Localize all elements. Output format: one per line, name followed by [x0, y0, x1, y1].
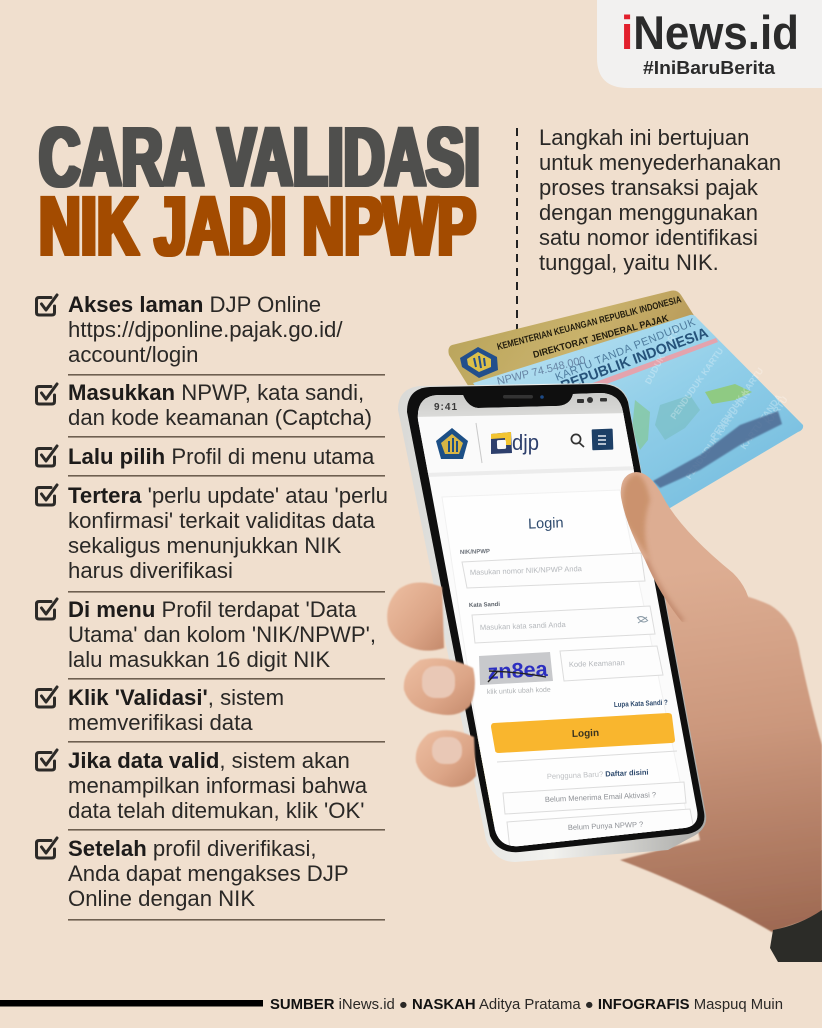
KTP text: KARTU TANDA PENDUDUK: [554, 316, 698, 384]
intro paragraph: [539, 125, 781, 275]
step 3: Lalu pilih Profil di menu utama: [68, 444, 375, 469]
intro paragraph: satu nomor identifikasi: [539, 225, 758, 250]
KTP watermark: KARTU: [763, 395, 790, 426]
step 6: [36, 685, 385, 743]
step 1: [36, 292, 385, 376]
step 5: lalu masukkan 16 digit NIK: [68, 647, 330, 672]
intro paragraph: Langkah ini bertujuan: [539, 125, 749, 150]
step 2: Masukkan NPWP, kata sandi,: [68, 380, 364, 405]
KTP watermark: PENDUDUK KARTU: [708, 366, 765, 441]
button: activation email: [503, 782, 686, 814]
app header: [414, 413, 638, 474]
djp logo: djp: [512, 430, 539, 455]
button: NPWP: [507, 809, 696, 850]
field: password: Kata Sandi: [469, 602, 500, 609]
register link: Pengguna Baru? Daftar disini: [547, 768, 649, 781]
status icons: [577, 397, 607, 403]
phone bezel: [407, 384, 704, 852]
step 7: Jika data valid, sistem akan: [68, 748, 350, 773]
step 1: https://djponline.pajak.go.id/: [68, 317, 343, 342]
KTP watermark: [643, 323, 790, 481]
field: NIK: [460, 549, 645, 588]
intro paragraph: untuk menyederhanakan: [539, 150, 781, 175]
KTP text: NPWP 74.548.000: [496, 354, 587, 388]
illustration: finger 2: [404, 658, 475, 715]
step 3: [36, 444, 385, 477]
step 1: Akses laman DJP Online: [68, 292, 321, 317]
field: NIK: Masukan nomor NIK/NPWP Anda: [470, 564, 583, 577]
yellow side strip: [476, 730, 494, 824]
menu button: [592, 429, 613, 450]
title: CARA VALIDASI: [39, 110, 480, 204]
step 8: Anda dapat mengakses DJP: [68, 861, 349, 886]
illustration: thumb: [621, 472, 750, 622]
captcha: zn8ea: [487, 658, 548, 684]
step 5: Utama' dan kolom 'NIK/NPWP',: [68, 622, 376, 647]
step 6: Klik 'Validasi', sistem: [68, 685, 284, 710]
logo tagline: #IniBaruBerita: [643, 58, 776, 78]
step 7: data telah ditemukan, klik 'OK': [68, 798, 364, 823]
button: activation email: Belum Menerima Email Aktivasi ?: [545, 790, 656, 804]
NPWP card text: KEMENTERIAN KEUANGAN REPUBLIK INDONESIA: [496, 294, 683, 353]
title: NIK JADI NPWP: [39, 179, 476, 273]
KTP watermark: DUDUK KARTU: [643, 323, 683, 386]
field: security code: Kode Keamanan: [569, 658, 625, 669]
step 1: account/login: [68, 342, 198, 367]
status bar: [418, 393, 624, 418]
illustration: finger 1: [387, 582, 444, 651]
field: NIK: NIK/NPWP: [460, 549, 490, 556]
login button: Login: [572, 728, 599, 740]
sleeve: [770, 910, 822, 962]
phone screen: [418, 393, 698, 846]
step 4: harus diverifikasi: [68, 558, 233, 583]
captcha: [479, 652, 553, 696]
footer rule: [0, 1000, 263, 1006]
KTP signature smudge: [653, 411, 782, 488]
NPWP card text: DIREKTORAT JENDERAL PAJAK: [532, 313, 670, 361]
logo wordmark: iNews.id: [621, 6, 799, 59]
checklist: [36, 292, 388, 921]
step 5: Di menu Profil terdapat 'Data: [68, 597, 357, 622]
login button: [491, 713, 675, 753]
status time: 9:41: [434, 402, 458, 413]
KTP text: REPUBLIK INDONESIA: [559, 325, 711, 395]
step 5: [36, 597, 385, 680]
KTP watermark: PENDUDUK KARTU: [668, 346, 725, 421]
intro paragraph: tunggal, yaitu NIK.: [539, 250, 719, 275]
step 4: Tertera 'perlu update' atau 'perlu: [68, 483, 388, 508]
step 8: Setelah profil diverifikasi,: [68, 836, 317, 861]
divider: dashed line: [516, 128, 518, 331]
field: password: Masukan kata sandi Anda: [480, 620, 567, 632]
djp logo: [491, 430, 539, 455]
illustration: phone: [398, 380, 720, 870]
KTP map: [632, 400, 650, 450]
step 7: [36, 748, 385, 831]
step 8: [36, 836, 385, 921]
illustration: palm: [620, 490, 822, 962]
step 7: menampilkan informasi bahwa: [68, 773, 368, 798]
login heading: Login: [528, 515, 564, 533]
NPWP emblem: [460, 347, 498, 378]
illustration: finger 3: [416, 730, 476, 787]
KTP stripe: [560, 338, 718, 400]
step 4: sekaligus menunjukkan NIK: [68, 533, 341, 558]
illustration: NPWP card: [448, 290, 700, 400]
footer credits: SUMBER iNews.id ● NASKAH Aditya Pratama ● INFOGRAFIS Maspuq Muin: [270, 997, 783, 1013]
NPWP card text: [496, 294, 683, 361]
step 8: Online dengan NIK: [68, 886, 255, 911]
captcha: klik untuk ubah kode: [487, 687, 551, 696]
forgot password link: Lupa Kata Sandi ?: [614, 698, 668, 709]
KTP watermark: KARTU TANDA: [738, 392, 784, 451]
field: security code: [560, 646, 663, 681]
intro paragraph: dengan menggunakan: [539, 200, 758, 225]
KTP watermark: PENDUDUK KARTU TAN: [683, 389, 752, 481]
intro paragraph: proses transaksi pajak: [539, 175, 759, 200]
step 6: memverifikasi data: [68, 710, 253, 735]
title: [39, 110, 480, 273]
search icon: [571, 434, 584, 447]
logo panel: iNews.id: [597, 0, 822, 88]
kemenkeu logo: [436, 428, 468, 459]
step 2: dan kode keamanan (Captcha): [68, 405, 372, 430]
KTP text: [496, 316, 711, 395]
speaker and camera: [503, 395, 544, 399]
step 4: [36, 483, 388, 593]
illustration: KTP card: [473, 315, 803, 508]
field: password: [469, 602, 655, 643]
step 4: konfirmasi' terkait validitas data: [68, 508, 376, 533]
button: NPWP: Belum Punya NPWP ?: [568, 820, 643, 832]
step 2: [36, 380, 385, 438]
login card: [442, 490, 690, 850]
